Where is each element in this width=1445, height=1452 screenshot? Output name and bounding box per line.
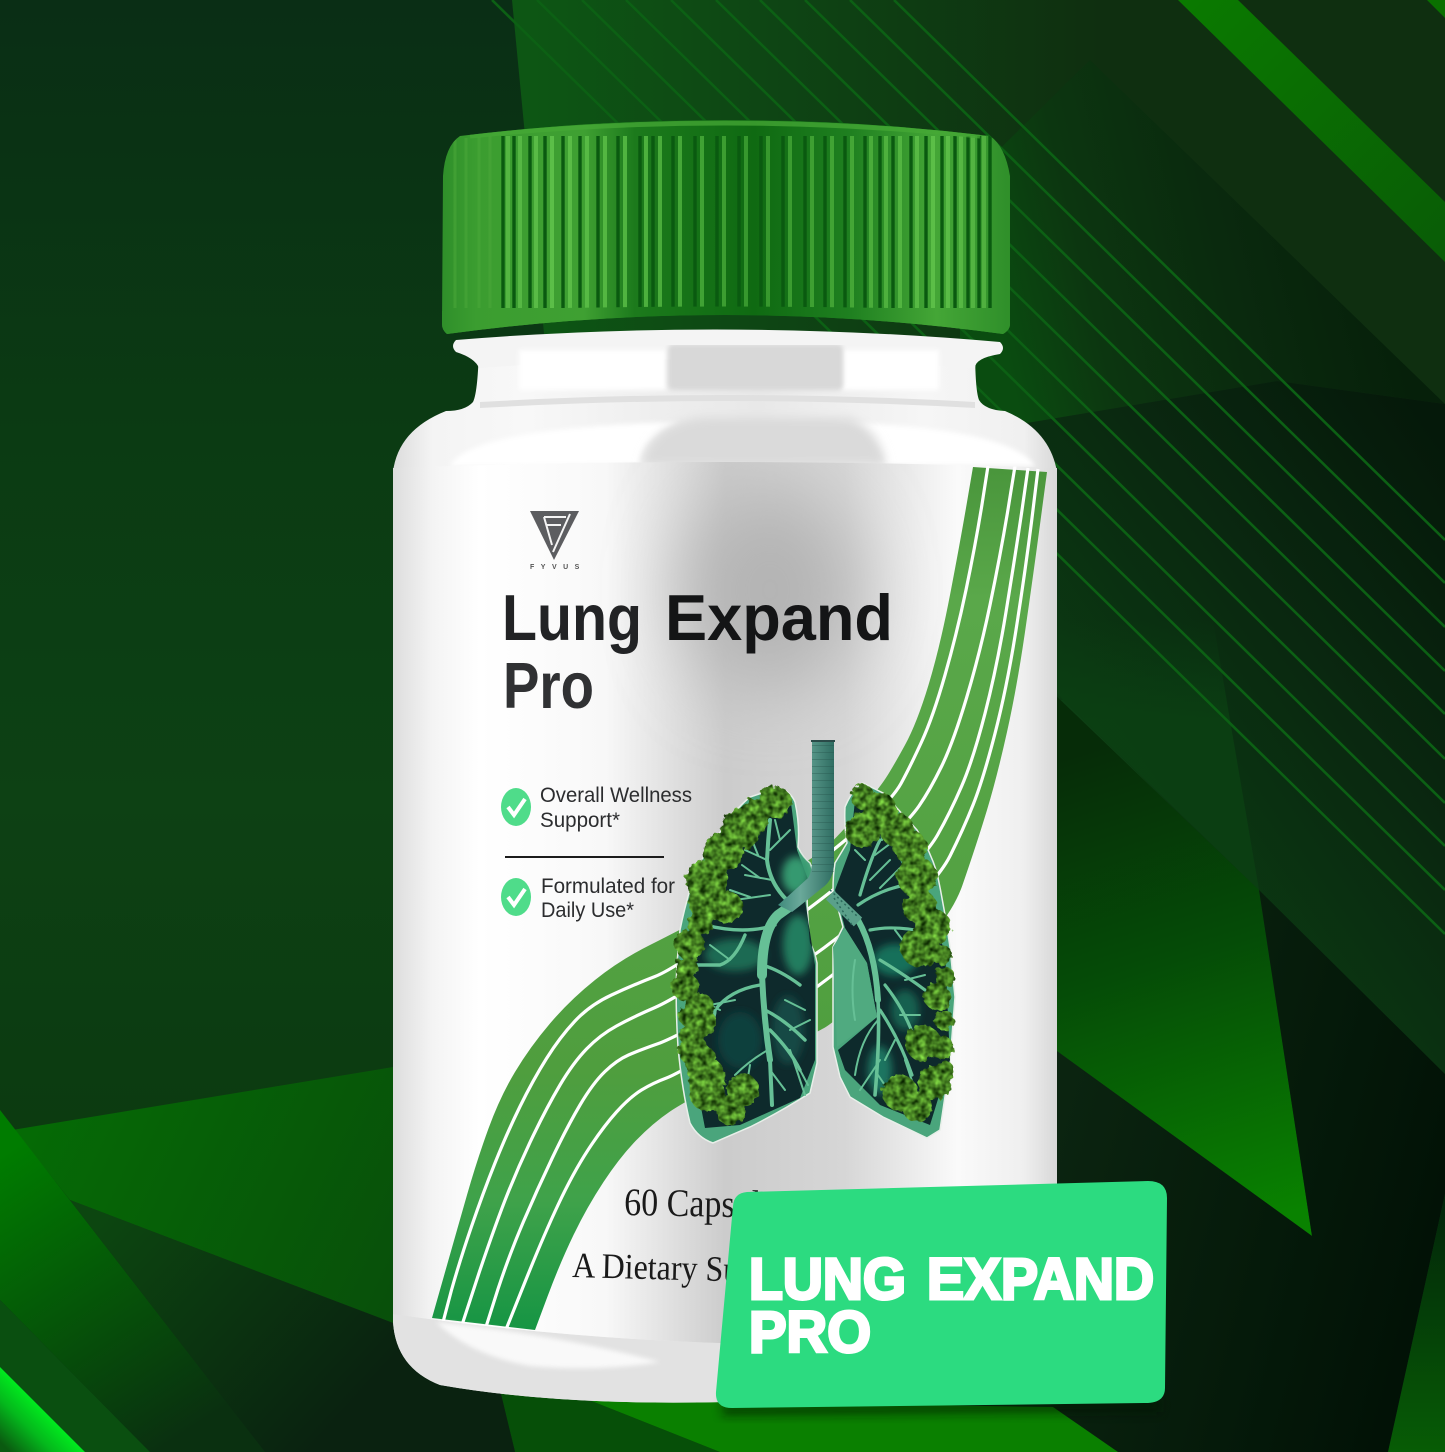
bottle — [393, 329, 1057, 1410]
product name: Pro — [503, 649, 594, 722]
dietary supplement line: A Dietary Supplement — [572, 1246, 859, 1293]
product name — [502, 581, 893, 722]
name card — [716, 1181, 1167, 1416]
divider rule — [505, 856, 664, 858]
green swoosh stripes — [432, 466, 1047, 1332]
card title — [749, 1247, 1154, 1365]
bottle body and neck — [393, 345, 1057, 1403]
bottle base highlight — [436, 1322, 660, 1368]
card title: EXPAND — [927, 1247, 1154, 1312]
product name: Lung — [502, 581, 642, 654]
airway branches — [695, 815, 925, 1105]
benefit: daily use — [501, 875, 675, 922]
card shadow — [722, 1398, 1160, 1416]
brand logo: FYVUS: FYVUS — [530, 564, 586, 571]
bottle cap — [442, 120, 1010, 336]
trachea — [778, 741, 858, 925]
benefit: overall wellness — [501, 784, 692, 832]
moss clusters — [671, 785, 955, 1125]
benefit: daily use: Daily Use* — [541, 899, 634, 922]
card title: PRO — [749, 1300, 871, 1365]
benefit: daily use: Formulated for — [541, 875, 675, 898]
card title: LUNG — [749, 1247, 906, 1312]
right lung — [833, 783, 955, 1138]
capsule count: 60 Capsules — [624, 1180, 790, 1226]
brand logo: FYVUS — [530, 511, 586, 571]
card background — [716, 1181, 1167, 1408]
benefit: overall wellness: Support* — [540, 809, 620, 832]
product name: Expand — [665, 581, 893, 654]
benefit: overall wellness: Overall Wellness — [540, 784, 692, 807]
left lung — [676, 788, 817, 1143]
lungs illustration — [671, 741, 955, 1143]
cap ribs — [442, 120, 1010, 336]
neck and shoulder highlights — [393, 344, 1057, 1410]
base rim shading — [393, 1318, 720, 1403]
bottle label — [393, 460, 1057, 1360]
neck collar — [453, 329, 1003, 368]
